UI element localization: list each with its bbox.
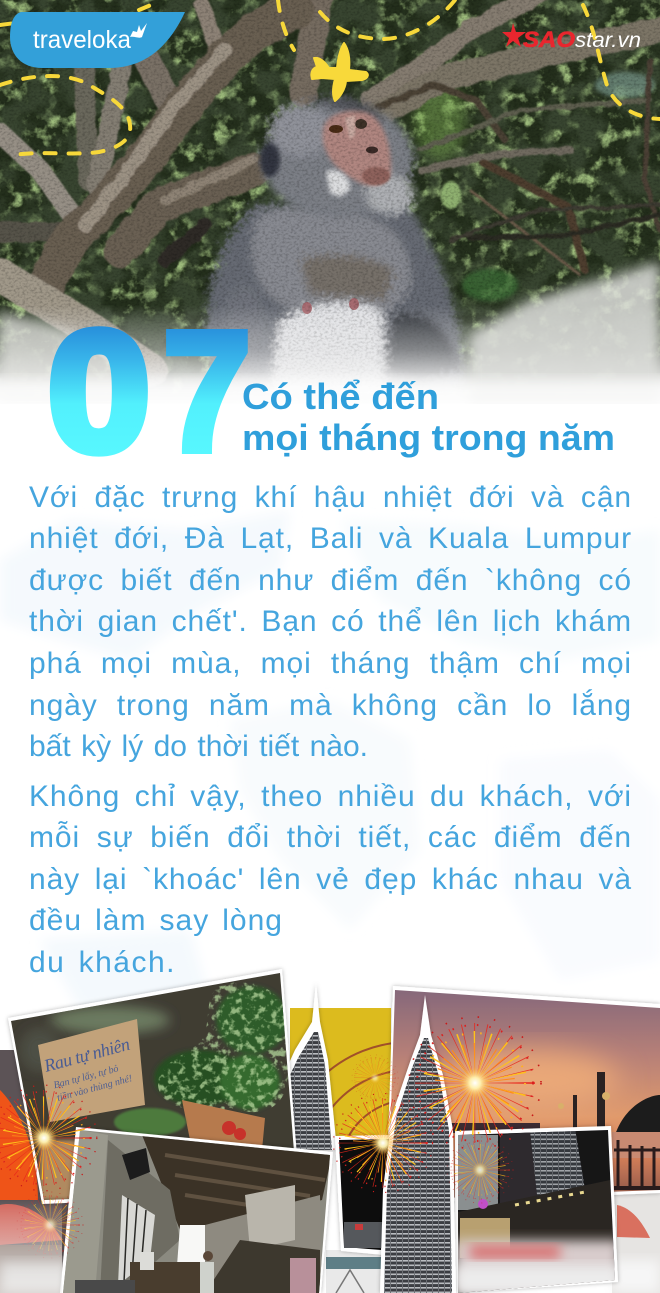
paragraph two: du khách. bbox=[29, 946, 176, 979]
dashed yellow flight path bbox=[0, 0, 660, 156]
heading: mọi tháng trong năm bbox=[242, 417, 615, 458]
paragraph one: thời gian chết'. Bạn có thể lên lịch khám bbox=[29, 605, 632, 638]
hero photo: monkey in tree bbox=[0, 0, 660, 414]
monkey head fur bbox=[262, 95, 414, 218]
photo: vegetables and sign bbox=[6, 967, 298, 1205]
fog along bottom edge bbox=[0, 1200, 62, 1293]
cardboard sign: Rau tự nhiên bbox=[41, 1034, 132, 1076]
paragraph one: được biết đến như điểm đến `không có bbox=[29, 564, 632, 597]
logo: Traveloka: traveloka bbox=[33, 26, 131, 54]
photo grain bbox=[0, 0, 660, 404]
big number 07 bbox=[48, 297, 251, 487]
paragraph one: nhiệt đới, Đà Lạt, Bali và Kuala Lumpur bbox=[29, 522, 632, 555]
paragraph one: ngày trong năm mà không cần lo lắng bbox=[29, 689, 632, 722]
yellow lantern panel bbox=[290, 1008, 391, 1136]
fireworks bbox=[0, 1017, 541, 1258]
logo: Saostar: SAO bbox=[523, 27, 575, 52]
cardboard sign bbox=[38, 1019, 145, 1122]
logo: Saostar: star.vn bbox=[575, 29, 641, 52]
paragraph two: này lại `khoác' lên vẻ đẹp khác nhau và bbox=[29, 863, 632, 896]
photo: shopping mall at night bbox=[455, 1126, 620, 1293]
paragraph one: phá mọi mùa, mọi tháng thậm chí mọi bbox=[29, 647, 632, 680]
photo: night fireworks bbox=[335, 1135, 392, 1255]
paragraph one: bất kỳ lý do thời tiết nào. bbox=[29, 730, 368, 763]
photo: cafe interior bbox=[60, 1125, 335, 1293]
lower strip below night photo bbox=[326, 1250, 386, 1293]
paragraph two: đều làm say lòng bbox=[29, 904, 283, 937]
paragraph two: mỗi sự biến đổi thời tiết, các điểm đến bbox=[29, 821, 632, 854]
cardboard sign: Bạn tự lấy, tự bỏ bbox=[52, 1063, 120, 1091]
tower left bbox=[262, 983, 337, 1150]
cardboard sign: tiền vào thùng nhé! bbox=[56, 1073, 134, 1104]
photo collage bbox=[0, 960, 660, 1293]
tree branches bbox=[0, 0, 660, 370]
monkey bbox=[206, 95, 465, 395]
tower right bbox=[380, 995, 456, 1293]
forest background bbox=[0, 0, 660, 404]
monkey face bbox=[302, 111, 391, 314]
logo: Traveloka bbox=[10, 12, 185, 68]
background street photo, left bbox=[0, 1050, 70, 1293]
big number 07: 0 bbox=[48, 297, 150, 487]
logo: Saostar bbox=[502, 23, 641, 52]
icon: yellow plane bbox=[311, 43, 368, 101]
mist at bottom of photo bbox=[0, 262, 660, 414]
big number 07: 7 bbox=[163, 297, 251, 487]
paragraph one: Với đặc trưng khí hậu nhiệt đới và cận bbox=[29, 481, 632, 514]
paragraph two bbox=[10, 780, 632, 1292]
fog panel, right bottom bbox=[612, 1193, 660, 1293]
monkey ear bbox=[260, 143, 280, 177]
monkey body fur bbox=[206, 200, 465, 395]
paragraph two: Không chỉ vậy, theo nhiều du khách, với bbox=[29, 780, 632, 813]
paragraph one bbox=[29, 481, 632, 763]
faint world map backdrop bbox=[0, 510, 660, 1010]
photo: sunset waterfront bbox=[385, 985, 660, 1204]
heading: Có thể đến bbox=[242, 376, 439, 417]
heading bbox=[242, 376, 615, 458]
